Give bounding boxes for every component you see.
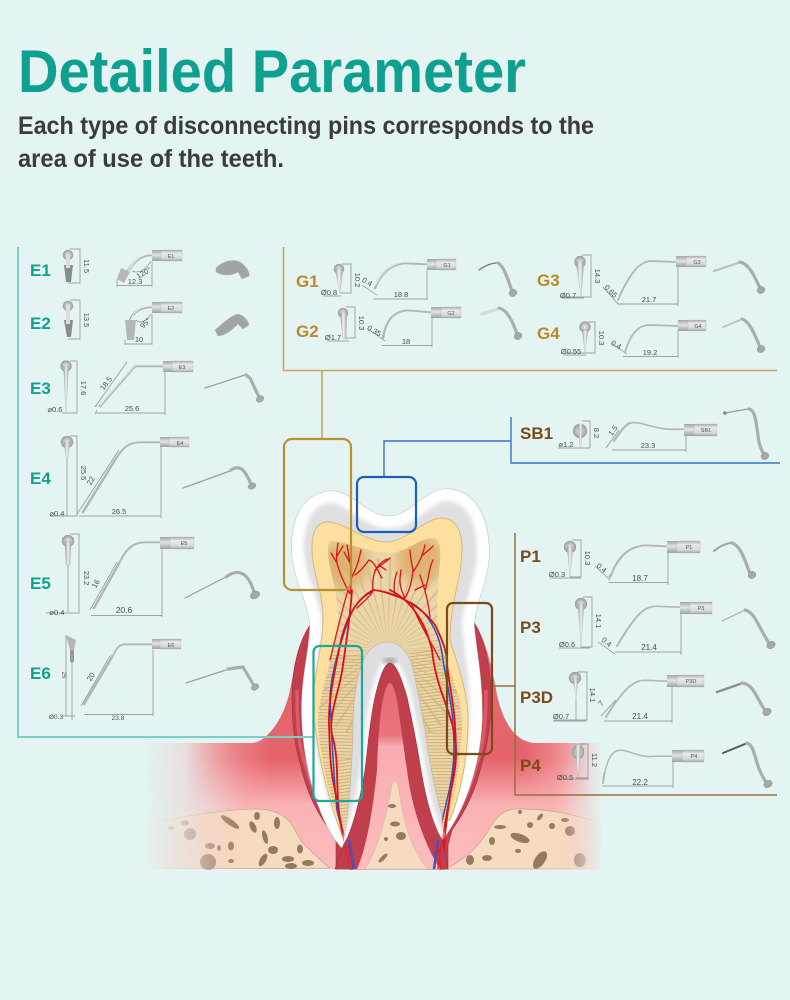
panel: SB1 tip: SB1 — [520, 424, 553, 443]
P3 tip: 14.1 — [594, 614, 603, 628]
highlight box: brown — [447, 603, 492, 754]
E4 tip: 22 — [85, 475, 97, 487]
P3 tip: Ø0.6 — [559, 640, 575, 649]
panel: P tips — [520, 540, 777, 789]
E5 tip: ⌀0.4 — [50, 608, 64, 617]
inner arch white edge — [346, 663, 441, 842]
panel: SB1 tip — [520, 409, 770, 461]
panel: SB1 tip: 1.5 — [606, 424, 620, 437]
subtitle text block — [18, 112, 594, 173]
P1 tip: Ø0.3 — [549, 570, 565, 579]
P3D tip: P3D — [520, 688, 553, 707]
G1 tip — [296, 259, 518, 300]
title: Detailed Parameter — [18, 38, 526, 105]
vessels at root exit — [345, 845, 441, 869]
P3D tip: 7 — [596, 699, 606, 708]
G1 tip: 0.4 — [360, 275, 374, 288]
P1 tip: 10.3 — [583, 551, 592, 565]
E2 tip — [30, 300, 249, 345]
G4 tip: 10.3 — [597, 331, 606, 345]
highlight box: gold — [284, 439, 351, 590]
E1 tip: E1 — [30, 261, 51, 280]
gum tissue, red upper — [190, 625, 586, 800]
E3 tip: 17.6 — [79, 381, 88, 395]
E4 tip — [30, 436, 257, 518]
E1 tip: E1 — [168, 254, 174, 260]
G1 tip: 10.2 — [353, 273, 362, 287]
E3 tip: E3 — [30, 379, 51, 398]
enamel — [292, 489, 489, 849]
G4 tip: 0.4 — [609, 338, 623, 351]
P4 tip: 22.2 — [632, 778, 648, 787]
subtitle text block: area of use of the teeth. — [18, 145, 284, 173]
highlight box: blue — [357, 477, 416, 532]
P1 tip: P1 — [686, 545, 692, 551]
inter-root bone spike — [365, 781, 428, 869]
P4 tip: P4 — [691, 754, 697, 760]
E1 tip: 12.3 — [128, 277, 142, 286]
P1 tip: P1 — [520, 547, 541, 566]
E6 tip: Ø0.3 — [49, 714, 63, 721]
P3 tip: 0.4 — [600, 635, 613, 649]
G3 tip: 21.7 — [642, 295, 656, 304]
E6 tip: 25 — [60, 672, 66, 679]
G2 tip: G2 — [296, 322, 319, 341]
P1 tip: 0.4 — [595, 561, 608, 575]
periodontal ligament band around roots — [292, 622, 491, 869]
G1 tip: Ø0.8 — [321, 288, 337, 297]
E5 tip: E5 — [181, 541, 187, 547]
G2 tip: Ø1.7 — [325, 333, 341, 342]
P4 tip: 11.2 — [590, 753, 599, 767]
jaw bone — [130, 809, 610, 871]
E2 tip: 95° — [138, 316, 152, 330]
E2 tip: 10 — [135, 335, 143, 344]
band highlight — [297, 690, 486, 832]
tooth anatomy illustration — [130, 489, 610, 871]
P4 tip — [520, 743, 774, 789]
E4 tip: E4 — [177, 441, 183, 447]
panel: SB1 tip: 8.2 — [592, 428, 601, 438]
pulp chamber — [318, 538, 462, 834]
blue vessels at root exit — [349, 840, 438, 869]
inter-root gum, pink — [357, 683, 440, 869]
P3D tip: Ø0.7 — [553, 712, 569, 721]
inter-root gum, dark band — [335, 663, 448, 869]
E3 tip: E3 — [179, 365, 185, 371]
blood vessels — [329, 543, 456, 869]
P3D tip: 14.1 — [588, 688, 597, 702]
G2 tip — [296, 307, 523, 347]
crotch shadow — [383, 658, 397, 664]
E2 tip: 13.5 — [82, 313, 91, 327]
connector: P series panel frame and line — [492, 533, 777, 795]
E6 tip: E6 — [30, 664, 51, 683]
G1 tip: G1 — [296, 272, 319, 291]
G4 tip: Ø0.55 — [561, 347, 581, 356]
G2 tip: G2 — [447, 311, 455, 317]
E1 tip: 11.5 — [82, 259, 91, 273]
E3 tip: 25.6 — [125, 404, 139, 413]
G1 tip: 18.8 — [394, 290, 408, 299]
G3 tip: Ø0.7 — [560, 291, 576, 300]
E3 tip — [30, 360, 265, 415]
panel: SB1 tip: SB1 — [701, 428, 711, 434]
E3 tip: 18.5 — [98, 375, 114, 392]
E6 tip: 20 — [85, 671, 97, 683]
highlight box: teal — [314, 646, 362, 801]
P3D tip: P3D — [686, 679, 696, 685]
P3 tip: P3 — [698, 606, 704, 612]
G4 tip: G4 — [537, 324, 560, 343]
E5 tip: 16 — [90, 578, 102, 590]
G4 tip: 19.2 — [643, 348, 657, 357]
connector: E series panel frame — [18, 247, 313, 737]
G1 tip: G1 — [443, 263, 451, 269]
panel: G tips — [296, 255, 766, 358]
E4 tip: 25.5 — [79, 466, 88, 480]
P4 tip: Ø0.5 — [557, 773, 573, 782]
E5 tip: 20.6 — [116, 605, 133, 615]
G3 tip: 14.3 — [593, 269, 602, 283]
E5 tip: 23.2 — [82, 571, 91, 585]
P3 tip: P3 — [520, 618, 541, 637]
E5 tip: E5 — [30, 574, 51, 593]
inner root arch dentine — [343, 642, 442, 848]
connector: SB1 panel frame and line — [384, 417, 780, 477]
G3 tip: G3 — [537, 271, 560, 290]
panel: SB1 tip: 23.3 — [641, 441, 655, 450]
E4 tip: ⌀0.4 — [50, 509, 64, 518]
E6 tip — [30, 635, 260, 722]
G2 tip: 0.35 — [366, 323, 383, 338]
enamel highlight — [292, 489, 489, 849]
P1 tip — [520, 540, 757, 585]
G4 tip: G4 — [694, 324, 702, 330]
panel: E tips — [30, 249, 265, 722]
G2 tip: 18 — [402, 337, 410, 346]
E4 tip: 26.5 — [112, 507, 126, 516]
E2 tip: E2 — [168, 306, 174, 312]
inter-root bone pores — [377, 804, 406, 864]
P1 tip: 18.7 — [632, 574, 648, 583]
E6 tip: E6 — [168, 643, 174, 649]
connector: G series panel frame and line — [284, 247, 777, 439]
P4 tip: P4 — [520, 756, 541, 775]
P3D tip — [520, 672, 773, 723]
P3D tip: 21.4 — [632, 712, 648, 721]
E5 tip — [30, 534, 261, 617]
subtitle text block: Each type of disconnecting pins corresponds to the — [18, 112, 594, 140]
E2 tip: E2 — [30, 314, 51, 333]
G3 tip: 0.65 — [602, 283, 619, 300]
P3 tip — [520, 597, 777, 655]
G3 tip: G3 — [693, 260, 701, 266]
E4 tip: E4 — [30, 469, 51, 488]
E1 tip — [30, 249, 249, 287]
E6 tip: 23.8 — [112, 715, 125, 722]
G2 tip: 10.3 — [357, 316, 366, 330]
G3 tip — [537, 255, 766, 306]
dentin — [312, 518, 468, 835]
E3 tip: ⌀0.6 — [48, 405, 62, 414]
G4 tip — [537, 319, 766, 358]
panel: SB1 tip: ⌀1.2 — [559, 440, 573, 449]
E1 tip: 120° — [135, 265, 153, 281]
P3 tip: 21.4 — [641, 643, 657, 652]
gum tissue, pink base — [130, 743, 610, 869]
